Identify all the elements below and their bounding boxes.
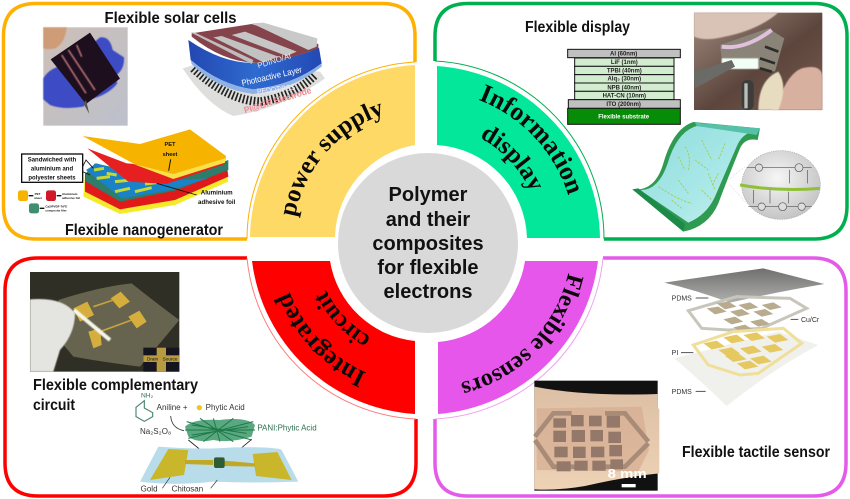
heading: Flexible tactile sensor: Flexible tactile sensor — [682, 444, 830, 461]
aniline molecule: NH₂ — [141, 393, 154, 400]
reaction labels: PANI:Phytic Acid — [257, 423, 317, 432]
layer labels: PI — [672, 350, 678, 357]
sector: power supply — [250, 65, 415, 237]
diagram: OLED layer stack — [568, 49, 680, 124]
callout: Aluminium adhesive foil — [157, 183, 236, 206]
panel: flexible sensors frame — [435, 258, 846, 496]
inset: drain and source electrodes: Source — [163, 356, 178, 361]
legend: adhesive foil — [62, 196, 80, 200]
callout: sandwiched box: aluminium and — [31, 166, 73, 172]
label: circuit: circuit — [315, 290, 369, 344]
callout: Aluminium adhesive foil: adhesive foil — [198, 199, 236, 206]
layer label: Photoactive Layer: Photoactive Layer — [241, 64, 303, 88]
illustration: bent transparent film — [632, 122, 760, 232]
callout: sandwiched box: Sandwiched with — [28, 157, 77, 163]
layer label: PI@GR Electrode: PI@GR Electrode — [243, 85, 313, 115]
legend — [18, 190, 80, 213]
PANI network — [185, 418, 255, 442]
diagram: OLED layer stack: NPB (40nm) — [607, 85, 641, 91]
label: Integrated: Integrated — [274, 292, 366, 388]
callout: sandwiched box: polyester sheets — [28, 175, 76, 181]
panel: integrated circuit frame — [5, 258, 416, 496]
diagram: nanogenerator layers — [18, 129, 236, 214]
chitosan film with gold electrodes: Gold — [141, 485, 158, 494]
inset: drain and source electrodes: Drain — [147, 356, 159, 361]
layer labels: Cu/Cr — [801, 317, 820, 324]
PI layer — [693, 328, 802, 375]
heading: Flexible display: Flexible display — [525, 19, 630, 36]
layer labels: PDMS — [672, 389, 692, 396]
diagram: solar cell layers — [183, 23, 325, 116]
heading: Flexible solar cells: Flexible solar cells — [104, 10, 236, 27]
panel: information display frame — [435, 4, 847, 239]
callout: PET sheet: PET — [164, 142, 176, 148]
heading: Flexible complementary circuit: Flexible complementary — [33, 377, 198, 394]
center circle — [338, 153, 518, 333]
callout: PET sheet — [163, 142, 177, 171]
layer label: PEDOT:PSS: PEDOT:PSS — [256, 83, 296, 96]
reaction labels: Na₂S₂O₈ — [140, 427, 171, 436]
sector: flexible sensors — [438, 261, 598, 414]
label: Information: Information — [479, 84, 578, 196]
chitosan film with gold electrodes: Chitosan — [172, 485, 203, 494]
panel: power supply frame — [4, 4, 415, 239]
label: display: display — [482, 126, 541, 188]
diagram: OLED layer stack: LiF (1nm) — [611, 60, 638, 66]
illustration: molecular structure magnifier — [740, 151, 820, 219]
center text: for flexible — [377, 257, 479, 279]
legend: composite film — [45, 208, 67, 212]
center text — [372, 184, 484, 303]
diagram: PANI phytic acid transistor — [136, 393, 317, 494]
diagram: OLED layer stack: Al (60nm) — [610, 52, 637, 58]
center text: Polymer — [389, 184, 468, 206]
legend: sheet — [34, 196, 42, 200]
diagram: OLED layer stack: HAT-CN (10nm) — [603, 94, 646, 100]
photo: flexible display device — [694, 13, 822, 110]
heading: Flexible complementary circuit — [33, 377, 198, 414]
legend: Aluminium — [62, 192, 78, 196]
label: Flexible sensors: Flexible sensors — [462, 273, 584, 393]
photo: tactile sensor on arm — [534, 381, 659, 491]
label: power supply: power supply — [284, 104, 381, 218]
layer label: PDINO/Al: PDINO/Al — [256, 51, 292, 70]
Cu/Cr layer — [688, 297, 807, 332]
diagram: OLED layer stack: Alq₃ (30nm) — [607, 77, 641, 83]
diagram: OLED layer stack: TPBI (40nm) — [607, 68, 642, 74]
legend: PET — [35, 192, 41, 196]
center text: and their — [386, 209, 470, 231]
diagram: OLED layer stack: Flexible substrate — [598, 114, 650, 120]
heading: Flexible nanogenerator: Flexible nanogenerator — [65, 222, 223, 239]
heading: Flexible complementary circuit: circuit — [33, 397, 75, 414]
layer labels: PDMS — [672, 296, 692, 303]
diagram: OLED layer stack: ITO (200nm) — [606, 102, 641, 108]
legend: Ca2/PVDF-TrFE — [45, 204, 67, 208]
bottom PDMS layer — [674, 332, 818, 406]
reaction labels: Aniline + — [157, 403, 188, 412]
center text: electrons — [384, 281, 472, 303]
photo: solar cell held in glove — [43, 27, 128, 126]
chitosan film with gold electrodes — [140, 447, 298, 494]
sector: integrated circuit — [252, 261, 415, 414]
reaction labels — [140, 403, 317, 436]
scale bar label: 8 mm — [608, 467, 647, 481]
callout: PET sheet: sheet — [163, 152, 177, 158]
top PDMS layer — [664, 268, 824, 303]
center text: composites — [372, 233, 484, 255]
photo: flexible circuit on film — [30, 272, 179, 372]
reaction labels: Phytic Acid — [206, 403, 245, 412]
callout: sandwiched box — [22, 154, 93, 182]
layer labels — [672, 296, 820, 396]
callout: Aluminium adhesive foil: Aluminium — [201, 189, 233, 196]
aniline molecule — [136, 393, 154, 421]
inset: drain and source electrodes — [143, 348, 179, 372]
diagram: tactile sensor exploded view — [664, 268, 824, 406]
sector: information display — [437, 66, 600, 238]
